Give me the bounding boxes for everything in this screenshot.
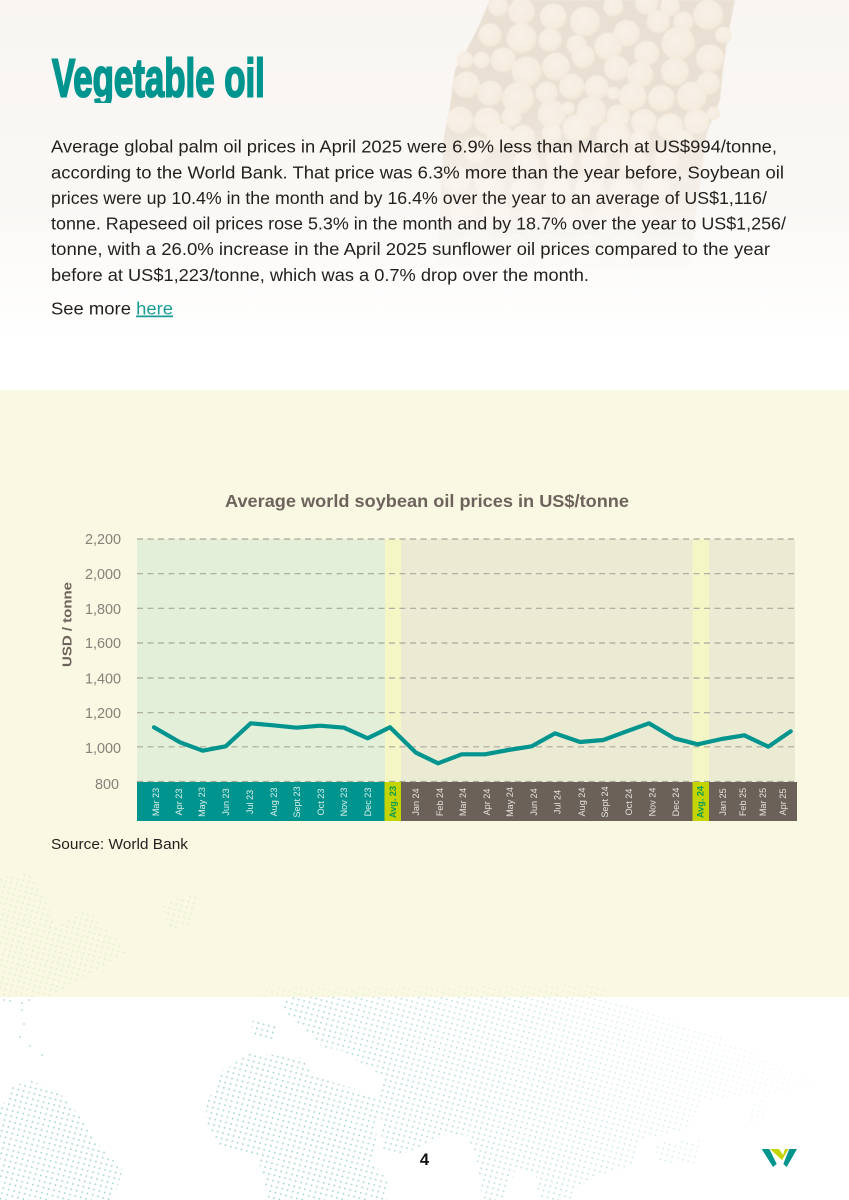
y axis labels: 2,000 — [85, 567, 121, 583]
x axis labels: Jun 23 — [221, 788, 231, 816]
x axis labels: Nov 24 — [648, 788, 658, 816]
body text: tonne. Rapeseed oil prices rose 5.3% in the month and by 18.7% over the year to US$1,256/ — [51, 214, 786, 234]
x axis labels: Feb 24 — [435, 788, 445, 816]
background: top photo wash — [0, 0, 849, 340]
price line — [154, 723, 791, 763]
title: Vegetable oil — [52, 48, 265, 108]
x axis strip — [137, 782, 797, 821]
see more link: See more here — [51, 298, 173, 318]
y axis labels: 1,000 — [85, 741, 121, 757]
x axis labels: Jun 24 — [529, 788, 539, 816]
body text: before at US$1,223/tonne, which was a 0.7% drop over the month. — [51, 265, 589, 285]
x axis labels: Jan 24 — [411, 788, 421, 816]
x axis labels: Mar 25 — [758, 788, 768, 816]
x axis labels: Avg. 23 — [388, 786, 398, 818]
body text: prices were up 10.4% in the month and by 16.4% over the year to an average of US$1,116/ — [51, 188, 767, 208]
x axis labels: Mar 24 — [458, 788, 468, 816]
chart title: Average world soybean oil prices in US$/tonne — [225, 491, 629, 511]
body text: tonne, with a 26.0% increase in the April 2025 sunflower oil prices compared to the year — [51, 239, 770, 259]
x axis labels: Apr 25 — [778, 789, 788, 815]
map: pale dots on panel — [0, 873, 610, 997]
y axis labels: 2,200 — [85, 532, 121, 548]
x axis labels: May 23 — [197, 787, 207, 817]
x axis labels: Jan 25 — [718, 788, 728, 816]
x axis labels: Dec 24 — [671, 788, 681, 816]
x axis labels: Apr 23 — [174, 789, 184, 815]
x axis labels: Avg. 24 — [696, 785, 706, 818]
x axis labels: Sept 24 — [600, 786, 610, 818]
x axis labels: Oct 23 — [316, 789, 326, 815]
x axis labels: May 24 — [505, 787, 515, 817]
logo — [762, 1149, 797, 1167]
x axis labels: Dec 23 — [363, 788, 373, 816]
body text: according to the World Bank. That price was 6.3% more than the year before, Soybean oil — [51, 162, 784, 182]
source note: Source: World Bank — [51, 836, 189, 853]
body text — [51, 137, 786, 285]
plot bands — [137, 539, 795, 782]
x axis labels: Sept 23 — [292, 786, 302, 818]
y axis title: USD / tonne — [60, 582, 74, 667]
panel: chart background — [0, 390, 849, 997]
x axis labels: Mar 23 — [151, 788, 161, 816]
x axis labels: Jul 24 — [552, 790, 562, 814]
x axis labels: Nov 23 — [339, 788, 349, 816]
x axis labels: Oct 24 — [624, 789, 634, 815]
x axis labels: Jul 23 — [245, 790, 255, 814]
map: stray dots top left — [3, 999, 43, 1056]
y axis labels: 1,600 — [85, 636, 121, 652]
chart — [60, 491, 797, 821]
x axis labels: Aug 24 — [577, 788, 587, 816]
y axis labels — [85, 532, 121, 793]
y axis labels: 1,400 — [85, 672, 121, 688]
page number: 4 — [420, 1151, 430, 1169]
x axis labels: Feb 25 — [738, 788, 748, 816]
y axis labels: 1,800 — [85, 602, 121, 618]
photo: soybeans in sack — [440, 0, 735, 224]
map: dotted world background — [0, 997, 829, 1200]
y axis labels: 800 — [95, 777, 119, 793]
body text: Average global palm oil prices in April 2025 were 6.9% less than March at US$994/tonne, — [51, 137, 777, 157]
y axis labels: 1,200 — [85, 706, 121, 722]
x axis labels: Apr 24 — [482, 789, 492, 815]
x axis labels — [151, 785, 788, 818]
x axis labels: Aug 23 — [269, 788, 279, 816]
